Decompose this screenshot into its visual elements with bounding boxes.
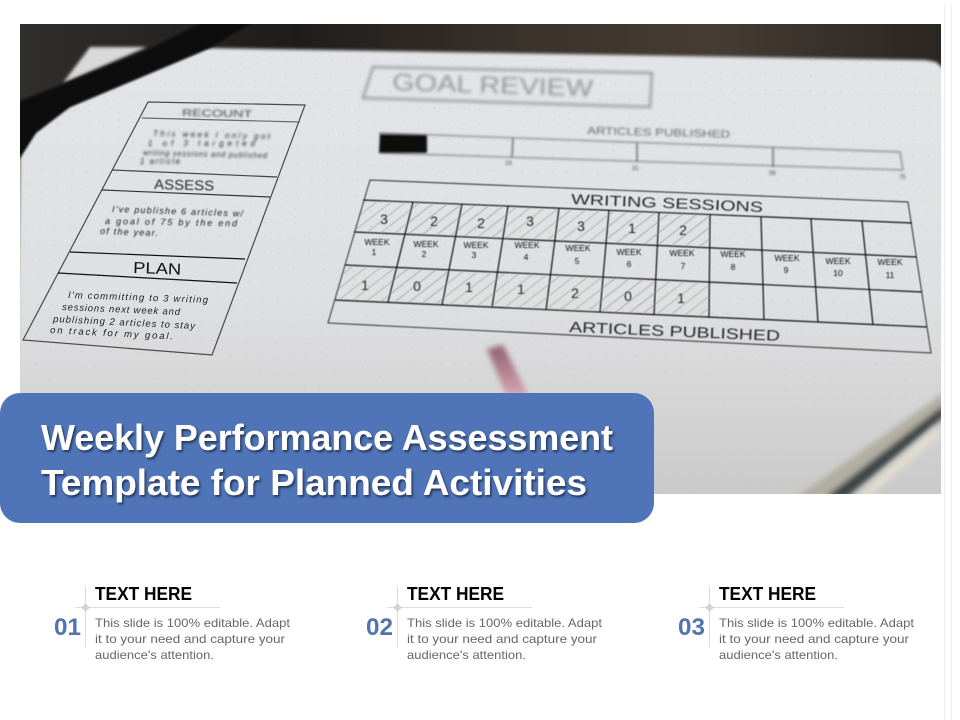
writing session counts: 2 [430,213,438,229]
week labels: 11 [886,270,895,280]
number 03: 03 [678,614,705,641]
worksheet frame and rules [23,102,305,355]
writing sessions table: ARTICLES PUBLISHED [569,319,781,345]
item 01 [54,584,291,662]
articles published counts: 1 [677,290,685,306]
hatched cells [335,200,710,317]
week labels: WEEK [774,253,800,263]
item 03 [678,584,915,662]
week labels: WEEK [463,240,489,250]
number 02: 02 [366,614,393,641]
plan section: sessions next week and [62,302,181,318]
articles published counts: 2 [571,285,579,301]
week labels: 4 [524,252,529,262]
week labels: 6 [627,259,632,269]
writing session counts [380,214,687,236]
body text: audience's attention. [719,648,838,662]
body text [719,616,915,662]
banner background [0,393,654,523]
writing session counts: 3 [526,213,534,229]
articles published progress bar [379,125,906,181]
writing session counts: 3 [380,211,388,227]
body text: This slide is 100% editable. Adapt [719,616,915,630]
title banner [0,393,654,523]
week labels: 2 [422,249,427,259]
body text: audience's attention. [407,648,526,662]
week labels: WEEK [413,239,439,249]
body text: This slide is 100% editable. Adapt [407,616,603,630]
recount section: 1 of 3 targeted [148,139,256,148]
assess section: ASSESS [154,176,214,194]
notebook paper [15,48,945,500]
body text: it to your need and capture your [95,632,285,646]
body text: This slide is 100% editable. Adapt [95,616,291,630]
week labels: WEEK [364,237,390,247]
body text: audience's attention. [95,648,214,662]
articles published progress bar: 31 [632,166,639,172]
goal review heading: GOAL REVIEW [392,69,594,102]
plan section: I'm committing to 3 writing [68,290,209,306]
writing session counts: 2 [679,222,687,238]
articles published progress bar: ARTICLES PUBLISHED [587,125,731,141]
left worksheet: recount, assess, plan [23,102,305,355]
articles published progress bar: 56 [769,171,776,177]
plan section: publishing 2 articles to stay [52,314,196,332]
plan section: on track for my goal. [50,325,173,342]
week labels: 10 [833,268,843,278]
week labels: 8 [731,262,736,272]
divider cross [75,586,220,647]
articles published progress bar: 19 [505,161,512,167]
page edge lines [944,4,952,720]
body text: it to your need and capture your [719,632,909,646]
articles published progress bar: 75 [899,175,906,181]
assess section: I've publishe 6 articles w/ [112,204,245,219]
recount section: 1 article [140,157,181,166]
heading: TEXT HERE [407,584,504,604]
title: Template for Planned Activities [41,462,587,503]
assess section: of the year. [100,226,158,238]
articles published counts: 1 [465,279,473,295]
recount section: This week I only got [153,129,271,141]
writing session counts: 3 [577,218,585,234]
plan section: PLAN [133,260,181,279]
table headings: WRITING SESSIONS [571,192,763,216]
articles published counts: 1 [517,281,525,297]
writing session counts: 2 [477,215,485,231]
goal review box [363,67,652,107]
recount section: RECOUNT [182,108,252,120]
body text [407,616,603,662]
plan section [50,260,209,342]
articles published counts: 0 [624,288,632,304]
heading: TEXT HERE [719,584,816,604]
week labels: WEEK [720,249,746,259]
week labels: 7 [681,261,686,271]
black pen [15,20,256,158]
articles published counts: 1 [361,277,369,293]
paper scrap above pen [63,47,147,83]
number 01: 01 [54,614,81,641]
week labels: WEEK [616,247,642,257]
week labels: 1 [372,247,377,257]
pink pencil [487,345,528,395]
week labels: WEEK [877,257,903,267]
week labels [364,237,903,280]
recount section: writing sessions and published [143,148,268,160]
articles published counts [362,280,685,304]
week labels: WEEK [669,248,695,258]
divider cross [699,586,844,647]
week labels: WEEK [565,243,591,253]
body text [95,616,291,662]
week labels: 9 [784,265,789,275]
body text: it to your need and capture your [407,632,597,646]
writing sessions table [328,180,931,353]
assess section [100,176,245,238]
week labels: 5 [575,256,580,266]
notebook edge stripes [795,392,945,498]
dark table background [20,24,941,330]
recount section [140,108,271,166]
articles published counts: 0 [413,278,421,294]
item 02 [366,584,603,662]
divider cross [387,586,532,647]
week labels: WEEK [514,240,540,250]
title [41,417,613,503]
photo: notebook goal review page [15,20,945,500]
heading: TEXT HERE [95,584,192,604]
week labels: 3 [472,250,477,260]
week labels: WEEK [825,256,851,266]
writing session counts: 1 [628,220,636,236]
title: Weekly Performance Assessment [41,417,613,458]
assess section: a goal of 75 by the end [105,216,238,228]
table frame and rules [328,180,931,353]
